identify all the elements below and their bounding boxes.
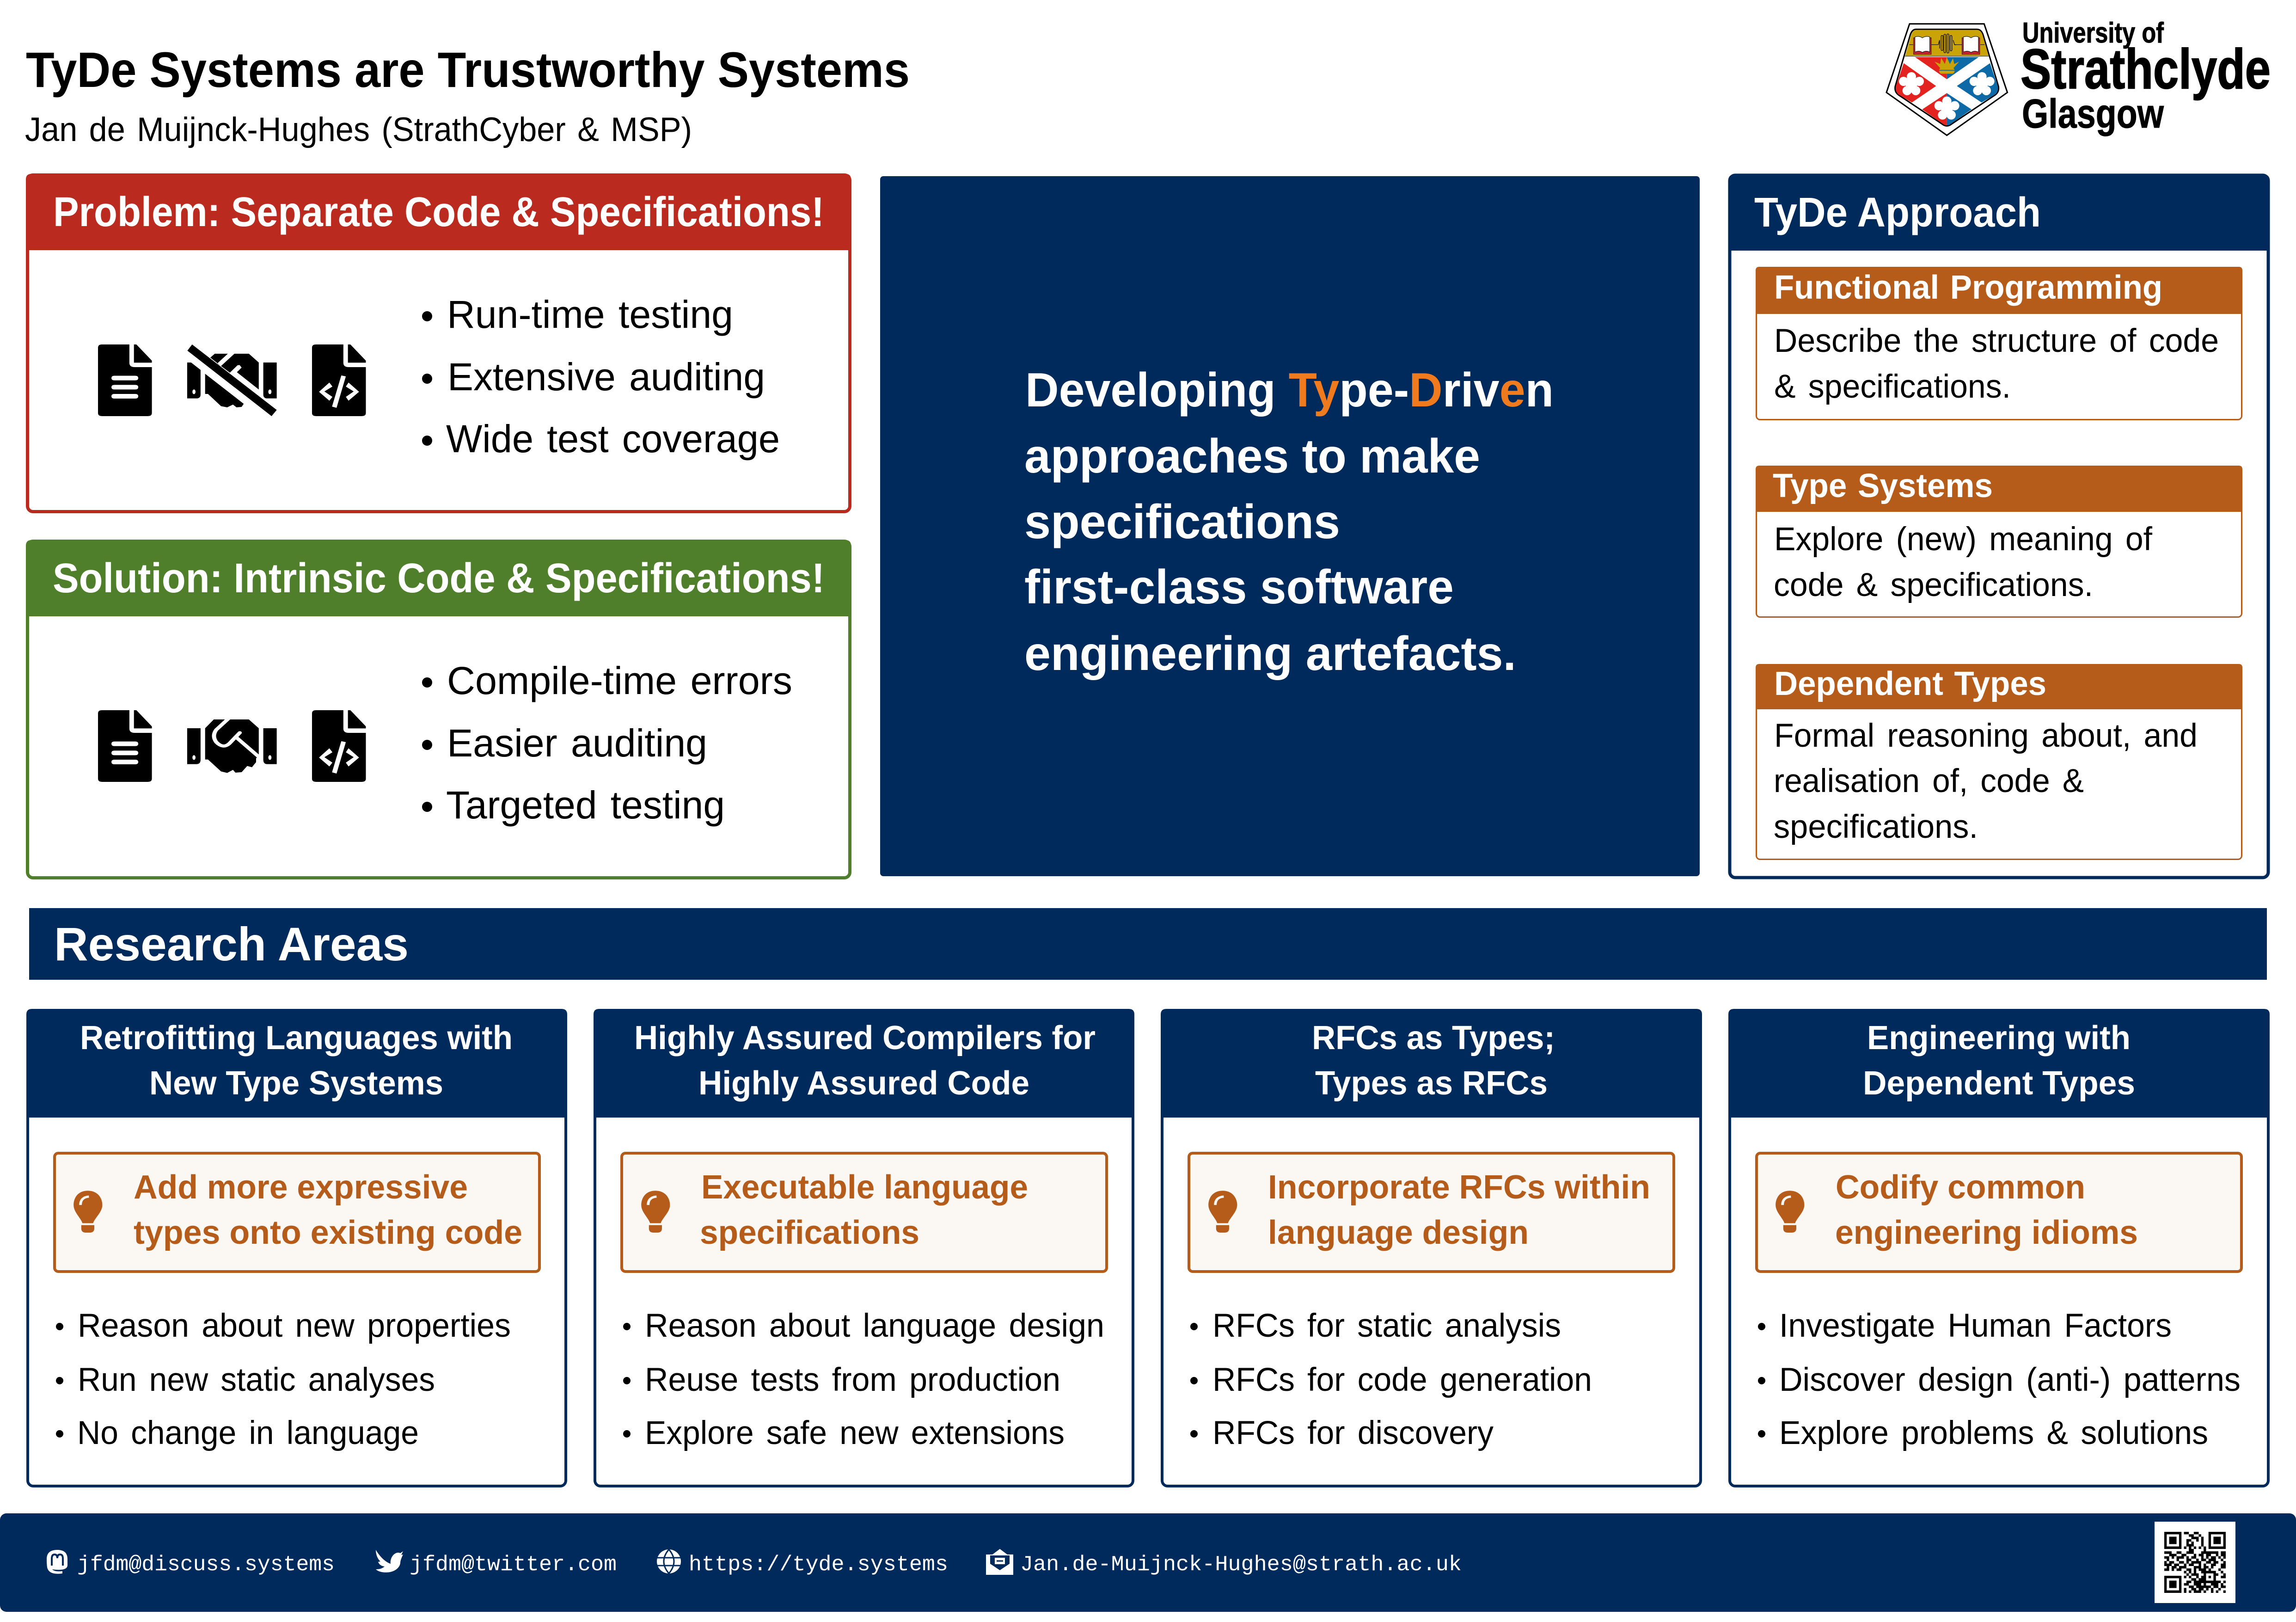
icon: light bulb (1208, 1191, 1237, 1233)
card heading: Dependent Types (1863, 1065, 2135, 1102)
box: functional programming: & specifications. (1774, 369, 2011, 405)
list: solution points (422, 659, 792, 827)
icon: light bulb (641, 1191, 670, 1233)
card heading: Highly Assured Code (698, 1065, 1029, 1102)
icon: mastodon (47, 1550, 67, 1574)
icon: broken handshake (187, 344, 277, 416)
callout: language design (1268, 1214, 1529, 1251)
icon: QR code (2155, 1522, 2235, 1603)
list: Reason about new properties (78, 1308, 511, 1344)
list (1190, 1308, 1592, 1451)
icon: light bulb (1776, 1191, 1804, 1233)
callout (622, 1153, 1107, 1272)
panel: central statement (880, 176, 1700, 876)
callout (1189, 1153, 1674, 1272)
list: Investigate Human Factors (1779, 1308, 2172, 1344)
icon: handshake (187, 719, 277, 773)
statement text: engineering artefacts. (1024, 627, 1516, 681)
box: type systems (1756, 466, 2242, 617)
list: Discover design (anti-) patterns (1779, 1362, 2241, 1398)
statement text: specifications (1024, 495, 1340, 549)
list: problem points (422, 293, 780, 461)
list: RFCs for discovery (1212, 1415, 1494, 1451)
icon: university crest (1886, 24, 2008, 135)
list: Reuse tests from production (645, 1362, 1060, 1398)
box: dependent types: specifications. (1774, 809, 1978, 845)
heading: TyDe approach: TyDe Approach (1754, 190, 2041, 236)
callout: engineering idioms (1835, 1214, 2138, 1251)
banner: research areas (29, 908, 2267, 980)
list: Explore problems & solutions (1779, 1415, 2208, 1451)
list (1758, 1308, 2241, 1451)
box: type systems: Type Systems (1773, 467, 1993, 504)
list: solution points: Targeted testing (446, 783, 725, 827)
card heading: Retrofitting Languages with (80, 1020, 513, 1057)
panel: highly assured compilers (594, 1009, 1134, 1486)
banner: research areas: Research Areas (54, 918, 409, 971)
list: problem points: Run-time testing (447, 293, 733, 336)
icon: code document (312, 710, 366, 782)
icon: specification document (98, 710, 152, 782)
university logo (1886, 17, 2271, 136)
card heading: Types as RFCs (1315, 1065, 1548, 1102)
box: functional programming: Describe the structure of code (1774, 323, 2219, 359)
box: dependent types: Formal reasoning about, and (1774, 718, 2198, 754)
statement text: first-class software (1024, 560, 1454, 614)
list (56, 1308, 511, 1451)
panel: TyDe approach (1728, 175, 2270, 878)
list: problem points: Extensive auditing (447, 355, 765, 399)
email address: Jan.de-Muijnck-Hughes@strath.ac.uk (1020, 1553, 1462, 1577)
card heading: New Type Systems (149, 1065, 443, 1102)
twitter handle: jfdm@twitter.com (410, 1553, 617, 1577)
list: RFCs for code generation (1212, 1362, 1592, 1398)
statement text (1024, 363, 1554, 681)
statement text: Developing Type-Driven (1025, 363, 1554, 417)
box: type systems: Explore (new) meaning of (1774, 521, 2152, 558)
list: solution points: Easier auditing (447, 721, 707, 765)
panel: RFCs as types (1161, 1009, 1702, 1486)
box: type systems: code & specifications. (1774, 567, 2093, 603)
box: functional programming: Functional Programming (1774, 269, 2162, 306)
logo text: University of: University of (2022, 17, 2164, 49)
card heading (1312, 1020, 1555, 1102)
panel: solution (26, 540, 851, 878)
panel: problem (26, 174, 851, 511)
box: dependent types: Dependent Types (1774, 665, 2046, 702)
callout: Add more expressive (134, 1169, 468, 1206)
list: solution points: Compile-time errors (447, 659, 792, 702)
icon: twitter (376, 1550, 403, 1573)
website url: https://tyde.systems (689, 1553, 948, 1577)
callout (55, 1153, 539, 1272)
card heading: Highly Assured Compilers for (634, 1020, 1096, 1057)
callout: specifications (700, 1214, 919, 1251)
callout: Codify common (1836, 1169, 2085, 1206)
icon: specification document (98, 344, 152, 416)
logo text: Glasgow: Glasgow (2022, 91, 2164, 136)
panel: engineering with dependent types (1728, 1009, 2270, 1486)
list: No change in language (77, 1415, 419, 1451)
list: problem points: Wide test coverage (446, 417, 780, 461)
icon: email envelope (986, 1549, 1013, 1575)
box: functional programming (1756, 267, 2242, 420)
icon: light bulb (73, 1191, 102, 1233)
title: TyDe Systems are Trustworthy Systems (26, 42, 910, 98)
icon: globe (657, 1549, 681, 1573)
author line: Jan de Muijnck-Hughes (StrathCyber & MSP) (25, 111, 692, 148)
card heading (1863, 1020, 2135, 1102)
heading: solution: Solution: Intrinsic Code & Specifications! (53, 555, 825, 602)
mastodon handle: jfdm@discuss.systems (77, 1553, 335, 1577)
callout (1757, 1153, 2241, 1272)
card heading (634, 1020, 1096, 1102)
list: Explore safe new extensions (645, 1415, 1065, 1451)
statement text: approaches to make (1024, 430, 1480, 483)
list: Run new static analyses (78, 1362, 435, 1398)
list: RFCs for static analysis (1212, 1308, 1561, 1344)
callout: types onto existing code (134, 1214, 522, 1251)
list (623, 1308, 1104, 1451)
card heading: RFCs as Types; (1312, 1020, 1555, 1057)
card heading (80, 1020, 513, 1102)
callout: Incorporate RFCs within (1268, 1169, 1650, 1206)
icon: code document (312, 344, 366, 416)
box: dependent types: realisation of, code & (1774, 763, 2084, 799)
footer (0, 1513, 2296, 1612)
box: dependent types (1756, 664, 2242, 859)
card heading: Engineering with (1867, 1020, 2131, 1057)
list: Reason about language design (645, 1308, 1104, 1344)
heading: problem: Problem: Separate Code & Specifications! (53, 189, 824, 235)
panel: retrofitting languages (26, 1009, 567, 1486)
callout: Executable language (701, 1169, 1028, 1206)
